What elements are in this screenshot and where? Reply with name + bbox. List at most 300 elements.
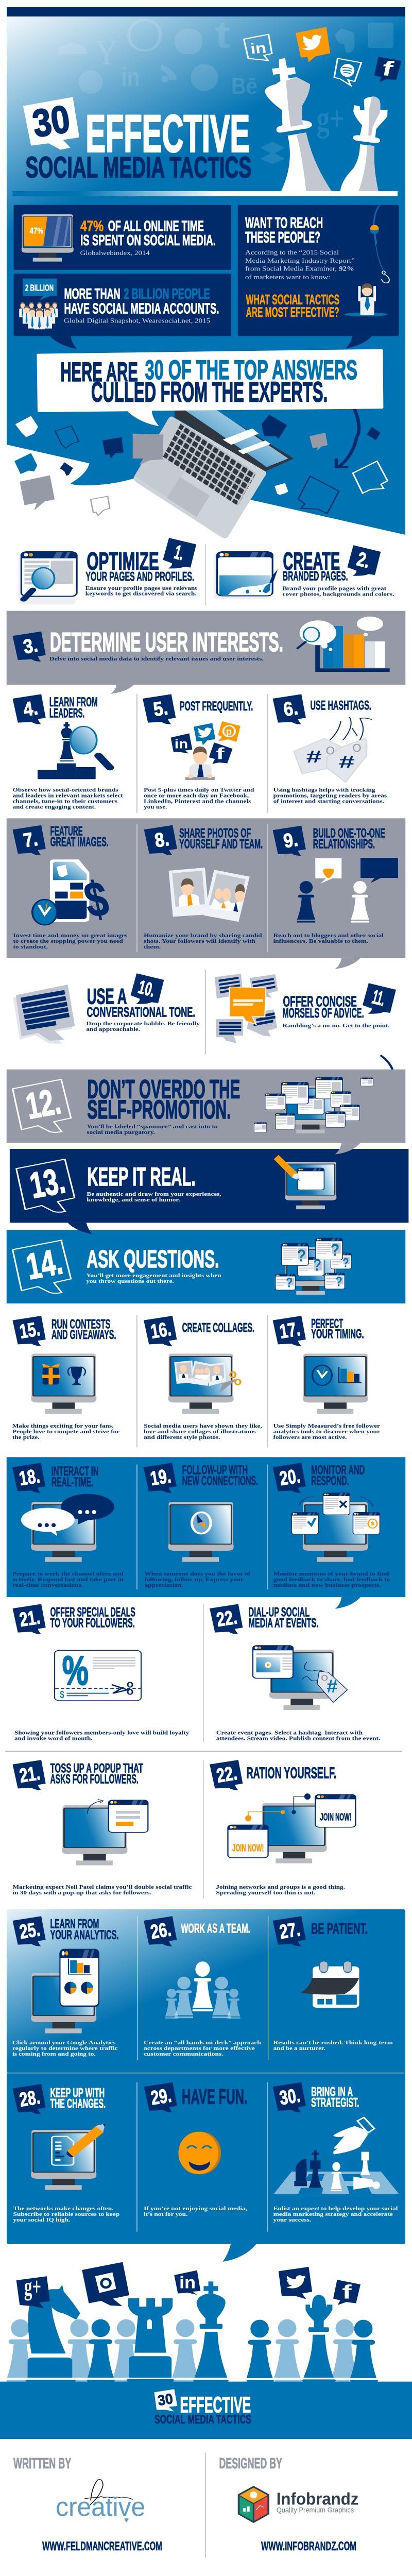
chess queen [340,96,388,191]
heading: RESPOND. [311,1473,349,1488]
section: popups and rationing: JOIN NOW! [320,1811,352,1823]
text block: Joining networks and groups is a good thing. [216,1884,345,1890]
icon: king on podium with magnifier [38,722,110,779]
heading: PERFECT [311,1316,343,1331]
number 1 [163,538,196,568]
section: tactics 1 and 2: YOUR PAGES AND PROFILES. [85,569,194,584]
tactic 18 [12,1463,124,1588]
icon: bar chart with bubbles [297,617,390,672]
chess king [265,58,332,191]
panel: tactics 28 to 30: KEEP UP WITH [50,2086,105,2100]
icon: monitor with windows [291,1493,380,1562]
tactic 29 [144,2082,248,2217]
panel: want to reach [238,205,399,349]
number 6 [273,694,306,724]
text block: to create the stopping power you need [13,938,124,944]
heading [311,1463,365,1488]
heading [52,1317,116,1342]
chess king and queen silhouettes [265,58,388,191]
panel: tactics 28 to 30: THE CHANGES. [50,2096,106,2111]
icon: monitor with analytics [31,1950,99,2033]
text block: Observe how social-oriented brands [12,787,118,793]
heading: top answers [60,355,357,408]
icon: calendar [301,1961,359,2008]
footer title: 30 [157,2390,174,2409]
text block: social media purgatory. [87,1129,155,1135]
icon: monitor with question pages: ? [331,1241,339,1260]
number 12 outline bubble [12,1079,71,1132]
text block: following, follow-up. Express your [145,1577,244,1582]
heading [85,547,194,584]
footer band: WWW.FELDMANCREATIVE.COM [42,2539,162,2553]
tactic 10 [13,973,200,1044]
number 3: 3. [22,634,39,658]
text block: Brand your profile pages with great [282,585,387,591]
text block [87,1124,217,1135]
number 22: 22. [215,1761,238,1787]
stat text: 47% [80,217,104,234]
text block: in 30 days with a pop-up that asks for followers. [12,1890,151,1895]
text block: deals: Showing your followers members-only love will build loyalty [14,1730,190,1736]
text block: Results can’t be rushed. Think long-term [273,2040,393,2045]
text block [273,2206,398,2223]
text block: and different style photos. [144,1434,220,1440]
panel: two billion: 2 BILLION PEOPLE [124,285,210,302]
heading [182,1463,258,1488]
text block: Ensure your profile pages use relevant [85,585,197,591]
text block: across departments for more effective [144,2045,255,2051]
text block: of marketers want to know: [245,273,330,281]
text block: followers are most active. [273,1434,347,1440]
number 22 [210,1760,243,1790]
text block: customer communications. [144,2051,224,2057]
icon: linkedin bubble [244,35,272,60]
number 12 outline bubble: 12. [23,1081,64,1127]
text block: good feedback to share, bad feedback to [273,1577,390,1582]
footer title [154,2389,251,2426]
arrow [381,1055,394,1095]
text block [144,933,262,950]
icon: pawns talking [297,858,398,923]
text block: them. [144,944,161,950]
stat text [64,285,219,325]
number 25: 25. [18,1918,42,1943]
heading: FEATURE [50,824,83,838]
header bar [7,7,405,16]
tactic 18: REAL-TIME. [52,1475,93,1489]
icon: monitor with windows: $ [371,1520,374,1527]
panel: stats: IS SPENT ON SOCIAL MEDIA. [80,232,216,248]
icon: facebook bubble: f [342,2281,352,2303]
text block: keywords to get discovered via search. [85,590,197,597]
credit: designed by: DESIGNED BY [219,2455,282,2471]
heading [87,1074,240,1124]
icon: linkedin bubble: in [249,40,267,57]
icon: monitor with windows: × [338,1496,348,1513]
text block: and create engaging content. [12,804,96,810]
text block: mediate and new business prospects. [273,1582,381,1588]
icon: monitor with popup [62,1800,148,1866]
number 29 [144,2082,177,2112]
panel: two billion: 2 BILLION [25,282,54,293]
text block: The networks make changes often. [13,2206,113,2211]
tactic 25 [12,1916,119,2057]
text block: You’ll be labeled “spammer” and cast into to [87,1124,217,1129]
section: tactics 15 to 17: RUN CONTESTS [52,1317,110,1331]
text block [282,585,394,597]
number 14 outline bubble [12,1240,71,1293]
text block: According to the “2015 Social [245,248,339,256]
text block: your social IQ high. [13,2217,70,2223]
text block: and approachable. [86,1026,140,1032]
text block [144,787,254,810]
logo: infobrandz: Quality Premium Graphics [277,2506,354,2514]
tactic: events [210,1604,347,1710]
number 4 [12,694,46,724]
tactic 1 [19,538,197,604]
hero background [7,16,405,535]
icon: spotify bubble [334,58,362,86]
tactic 30 [273,2082,399,2223]
text block [273,2040,393,2051]
gradient rule [12,191,398,196]
text block [273,933,384,944]
text block: from Social Media Examiner, [245,265,337,273]
icon: monitor with question pages [276,1238,351,1295]
chess crowd with social bubbles [7,2262,376,2378]
hero watermark icons: in [122,62,140,91]
heading [50,824,109,849]
text block: to standout. [13,944,48,950]
text block [273,1423,380,1440]
section: tactics 15 to 17: AND GIVEAWAYS. [52,1328,116,1342]
number 26: 26. [149,1918,173,1943]
icon: monitor with question pages: ? [336,1274,342,1290]
text block: love and share collages of illustrations [144,1429,256,1434]
number 9: 9. [282,828,299,852]
icon: monitor, video window and tag [253,1646,347,1710]
dark pawns [88,2319,376,2378]
panel: tactics 18 to 20 [7,1457,405,1609]
text block: Delve into social media data to identify relevant issues and user interests. [49,656,264,662]
icon: coupon: $ [60,1689,64,1701]
icon: monitor with compass [168,1502,234,1562]
number 10: 10. [136,976,158,1001]
text block: LinkedIn, Pinterest and the channels [144,798,251,804]
icon: monitor, video window and tag: # [327,1676,338,1697]
text block [216,1884,345,1895]
icon: coupon [55,1647,141,1701]
text block: Spreading yourself too thin is not. [216,1890,315,1895]
icon: window with brush [214,552,278,599]
heading [50,2086,106,2111]
number 13 outline bubble [16,1159,75,1212]
number 29: 29. [149,2084,173,2109]
icon: google plus bubble: g+ [24,2272,41,2301]
number 27 [273,1916,306,1946]
text block: media marketing strategy and accelerate [273,2211,393,2217]
heading [249,1605,318,1630]
tactic 28 [12,2084,119,2223]
logo: infobrandz [238,2486,358,2523]
number 10 [131,973,164,1004]
heading [50,1917,119,1942]
icon: twitter bubble [296,27,330,62]
icon: smiley [178,2132,221,2174]
number 22: 22. [215,1606,238,1631]
tactic 4 [12,694,123,810]
text block: Monitor mentions of your brand to find [273,1571,389,1577]
number 21: 21. [18,1606,42,1631]
icon: document bubble [13,985,75,1044]
text block: Using hashtags helps with tracking [273,787,375,793]
icon: monitor with question pages: ? [342,1256,349,1270]
number 7: 7. [22,827,39,852]
credit: written by [13,2455,162,2553]
text block: knowledge, and sense of humor. [87,1197,180,1202]
text block [245,248,355,281]
title [12,97,398,196]
text block [86,1021,200,1032]
panel: tactic 13 [10,1143,408,1234]
icon: monitor with join windows [228,1793,355,1863]
tactic 7 [12,824,127,950]
text block: People love to compete and strive for [12,1429,119,1434]
number 6: 6. [282,697,299,721]
icon: knight [28,2285,80,2378]
number 16: 16. [149,1317,173,1343]
icon: window with magnifier [19,552,77,604]
text block: the prize. [12,1434,40,1440]
stat text: Globalwebindex, 2014 [80,249,150,257]
text block: Click around your Google Analytics [12,2040,115,2045]
text block [87,1191,221,1202]
text block: you use. [144,804,167,810]
icon: monitor with gift and trophy [31,1353,96,1414]
panel: tactics 28 to 30 [7,2073,404,2262]
icon: person with social bubbles [171,721,241,780]
text block [13,933,127,950]
icon: hashtag tags [294,717,372,782]
section: deals and events: TO YOUR FOLLOWERS. [50,1616,135,1630]
icon: facebook bubble [333,2280,360,2305]
hero watermark icons: Y [95,32,118,72]
number 19: 19. [149,1465,173,1490]
text block [12,1884,192,1895]
text block: cover photos, backgrounds and colors. [282,591,394,597]
heading: USE A [87,984,127,1009]
light pawns [7,2319,358,2378]
tactic 16 [144,1316,262,1440]
text block [12,1423,119,1440]
icon: twitter bubble [279,2267,312,2299]
icon: instagram bubble [82,2262,129,2306]
panel: two billion [14,274,231,349]
text block [273,1571,390,1588]
icon: google plus bubble [16,2272,50,2309]
icon: cluster of bubbles [215,974,278,1043]
heading [87,984,195,1020]
icon: queen [303,2295,334,2378]
laptop scene [14,390,388,538]
callout: 2 billion [23,279,57,300]
panel: online time: OF ALL ONLINE TIME [108,217,204,234]
icon: monitor 47 percent [22,214,74,262]
callout: top answers [37,349,383,426]
text block: events: attendees. Stream video. Publish content from the event. [216,1735,380,1741]
text block: Post 5-plus times daily on Twitter and [144,787,254,793]
tactic 26 [144,1916,261,2057]
number 7 [12,825,46,855]
tactic: popup [12,1760,192,1895]
tactic 2 [214,545,394,599]
number 15: 15. [18,1317,42,1343]
footer band: EFFECTIVE [180,2392,251,2417]
text block: your success. [273,2217,311,2223]
icon: monitor with collage [168,1353,241,1414]
number 3 [12,632,46,662]
number 4: 4. [22,697,39,721]
stat text [80,217,216,257]
heading [52,1464,98,1489]
text block: Reach out to bloggers and other social [273,933,384,938]
heading [311,2084,359,2110]
panel: tactics 25 to 30 background [7,1909,405,2244]
panel: tactics 18 to 20: FOLLOW-UP WITH [182,1463,248,1477]
section: popups and rationing [5,1730,402,1899]
heading [49,695,98,720]
text block: events: Create event pages. Select a hashtag. Interact with [216,1730,363,1736]
panel: tactics 7 to 9: YOURSELF AND TEAM. [179,837,263,851]
icon: monitor with question pages: ? [297,1246,306,1265]
icon: monitor with join windows: JOIN NOW! [232,1842,264,1854]
number 17: 17. [278,1317,302,1343]
number 28 [12,2084,46,2114]
tactic 18: INTERACT IN [52,1464,98,1478]
tactic 17 [273,1316,380,1440]
panel: tactic 14 [7,1223,405,1303]
tactic 4: LEADERS. [49,706,84,720]
icon: hashtag tags: # [306,748,322,767]
heading [311,1316,364,1341]
text block [12,2040,118,2057]
section: tactics 4 to 6 [7,694,405,969]
text block: shots. Your followers will identify with [144,938,255,944]
number 19 [144,1463,177,1493]
credit: written by: WRITTEN BY [13,2455,71,2471]
icon: crowd [19,302,58,329]
panel: tactics 25 to 27: YOUR ANALYTICS. [50,1928,119,1942]
number 20 [273,1463,306,1493]
text block [144,2206,247,2217]
tactic: popup: ASKS FOR FOLLOWERS. [50,1772,139,1786]
text block: is coming from and going to. [12,2051,96,2057]
number 15 [12,1316,46,1346]
icon: hand and chess board [274,2117,399,2194]
text block: analytics tools to discover when your [273,1429,380,1434]
text block: When someone does you the favor of [145,1571,251,1577]
text block: You’ll get more engagement and insights when [86,1273,221,1278]
text block: and leaders in relevant markets select [12,792,123,799]
icon: laptop [134,410,294,538]
text block: Social media users have shown they like, [144,1423,262,1429]
heading [179,826,263,851]
text block: of interest and starting conversations. [273,798,384,804]
section: tactics 10 and 11: CONVERSATIONAL TONE. [87,1005,195,1020]
icon: hashtag tags: # [339,753,355,772]
panel: tactic 13: KEEP IT REAL. [87,1162,196,1191]
section: deals and events [12,1604,347,1742]
number 8: 8. [153,827,170,852]
heading: OPTIMIZE [87,547,159,575]
text block [13,2206,119,2223]
section: tactics 10 and 11 [13,970,396,1095]
text block: promotions, targeting readers by areas [273,792,387,799]
number 30 bubble [23,97,79,150]
hero watermark icons: Bē [231,73,258,99]
icon: king [195,2281,227,2378]
logo: feldman creative [56,2480,145,2523]
text block: Use Simply Measured’s free follower [273,1423,380,1429]
number 27: 27. [278,1918,302,1943]
icon: monitor with question pages: ? [286,1275,293,1290]
text block: actively. Respond fast and take part in [12,1577,124,1582]
tactic: popup: TOSS UP A POPUP THAT [50,1761,143,1775]
panel: tactic 14: ASK QUESTIONS. [87,1245,219,1273]
tactic 15 [12,1316,119,1440]
text block: and be a nurturer. [273,2045,325,2051]
text block: If you’re not enjoying social media, [144,2206,247,2211]
footer band [0,2379,412,2557]
heading [283,547,348,583]
text block [144,2040,261,2057]
hero watermark icons [58,14,393,164]
tactic 19 [144,1463,258,1588]
number 21 [12,1760,46,1790]
heading: LEARN FROM [50,1917,99,1931]
number 16 [144,1316,177,1346]
text block: Create an “all hands on deck” approach [144,2040,261,2045]
icon: linkedin bubble: in [179,2273,196,2292]
hero watermark icons: t [215,14,230,56]
text block: regularly to determine where traffic [12,2045,118,2051]
logo: feldman creative: creative [56,2493,145,2522]
number 30 [273,2082,306,2112]
panel: tactics 7 to 9: GREAT IMAGES. [50,835,109,849]
number 21: 21. [18,1761,42,1787]
text block: deals: and invoke word of mouth. [14,1735,93,1741]
number 5: 5. [152,697,169,721]
text block [273,787,387,804]
text block: appreciation. [145,1582,183,1588]
number 30: 30. [278,2084,302,2109]
text block: Make things exciting for your fans. [12,1423,113,1429]
icon: monitor with chat [21,1494,114,1562]
icon: man in water [344,283,388,316]
number 28: 28. [18,2086,42,2111]
section: deals and events: OFFER SPECIAL DEALS [50,1605,135,1619]
text block: Subscribe to reliable sources to keep [13,2211,119,2217]
text block: Invest time and money on great images [13,933,127,938]
text block: Humanize your brand by sharing candid [144,933,262,938]
tactic 20 [273,1463,390,1588]
icon: linkedin bubble [174,2270,200,2295]
number 26 [144,1916,177,1946]
text block: Rambling’s a no-no. Get to the point. [282,1023,390,1028]
number 1: 1. [172,540,186,565]
icon: phone, clock and dollar: $ [79,872,113,928]
icon: monitor with pencil [274,1155,336,1209]
